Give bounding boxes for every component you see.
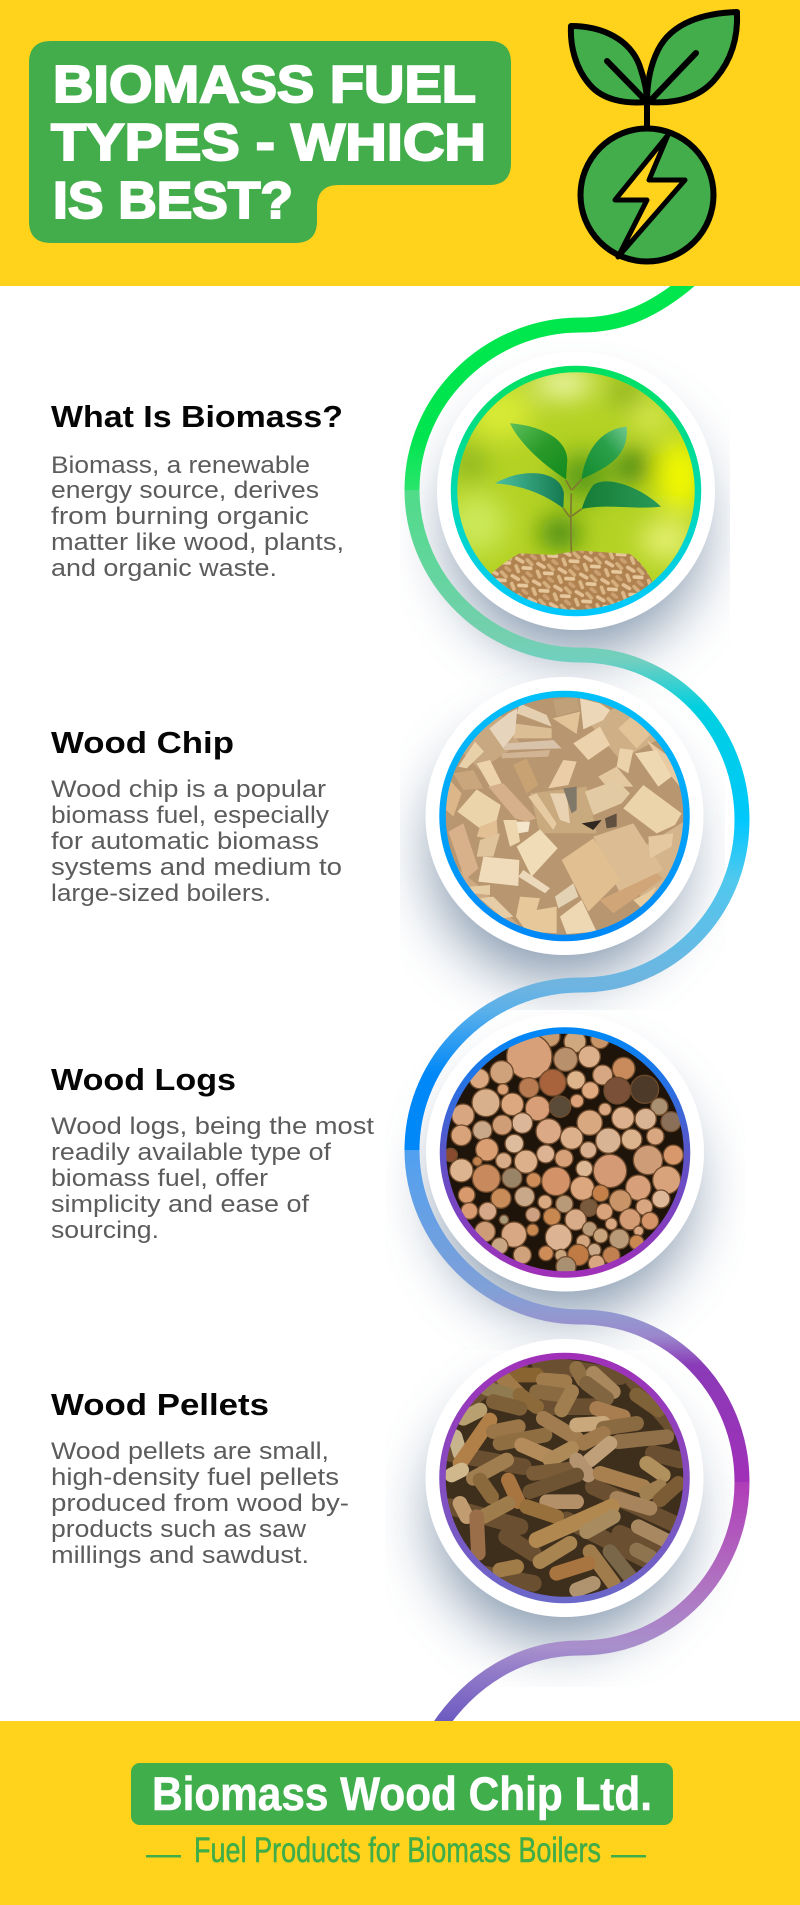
- step 2 text: Wood Chip: biomass fuel, especially: [51, 802, 329, 829]
- ring: [442, 1356, 686, 1600]
- title text: BIOMASS FUEL: [53, 56, 476, 114]
- photo circle 3: wood logs: [426, 1014, 704, 1292]
- title text: IS BEST?: [53, 172, 293, 230]
- ring: [443, 1030, 687, 1274]
- title text: [51, 56, 486, 230]
- step 1 text: What Is Biomass: [51, 399, 344, 582]
- step 2 text: Wood Chip: [51, 725, 342, 907]
- step 3 text: Wood Logs: Wood logs, being the most: [51, 1113, 374, 1140]
- ring: [442, 694, 686, 938]
- step 1 text: What Is Biomass: energy source, derives: [51, 477, 319, 504]
- header band: [0, 0, 800, 286]
- step 4 text: Wood Pellets: products such as saw: [51, 1516, 307, 1543]
- step 4 text: Wood Pellets: Wood Pellets: [51, 1387, 269, 1422]
- photo circle 4: wood pellets: [426, 1339, 704, 1617]
- step 2 text: Wood Chip: systems and medium to: [51, 854, 342, 881]
- ring: [454, 369, 698, 613]
- step 2 text: Wood Chip: large-sized boilers.: [51, 880, 271, 907]
- step 4 text: Wood Pellets: [51, 1387, 349, 1569]
- logo badge: [131, 1763, 673, 1825]
- icon: sprout with energy bolt: [571, 12, 737, 262]
- step 4 text: Wood Pellets: produced from wood by-: [51, 1490, 349, 1517]
- step 2 text: Wood Chip: Wood chip is a popular: [51, 776, 326, 803]
- step 1 text: What Is Biomass: matter like wood, plants,: [51, 529, 344, 556]
- step 4 text: Wood Pellets: Wood pellets are small,: [51, 1438, 329, 1465]
- step 3 text: Wood Logs: simplicity and ease of: [51, 1191, 309, 1218]
- tagline: Fuel Products for Biomass Boilers: [194, 1831, 601, 1870]
- step 1 text: What Is Biomass: and organic waste.: [51, 555, 277, 582]
- step 3 text: Wood Logs: biomass fuel, offer: [51, 1165, 268, 1192]
- step 4 text: Wood Pellets: millings and sawdust.: [51, 1542, 309, 1569]
- footer band: [0, 1721, 800, 1905]
- winding gradient path: [412, 274, 742, 1730]
- step 2 text: Wood Chip: Wood Chip: [51, 725, 234, 760]
- step 4 text: Wood Pellets: high-density fuel pellets: [51, 1464, 339, 1491]
- leaves: [510, 423, 567, 479]
- photo circle 2: wood chips: [426, 677, 704, 955]
- step 1 text: What Is Biomass: Biomass, a renewable: [51, 452, 310, 479]
- photo circle 1: seedling on pellets: [437, 352, 715, 630]
- step 3 text: Wood Logs: sourcing.: [51, 1217, 159, 1244]
- pellet pile: [492, 550, 652, 610]
- step 3 text: Wood Logs: readily available type of: [51, 1139, 331, 1166]
- step 3 text: Wood Logs: [51, 1062, 374, 1244]
- title text: TYPES - WHICH: [51, 114, 486, 172]
- stem: [563, 479, 582, 552]
- step 1 text: What Is Biomass: What Is Biomass?: [51, 399, 343, 434]
- card shadows: [432, 402, 702, 1641]
- title badge: [29, 41, 511, 243]
- step 2 text: Wood Chip: for automatic biomass: [51, 828, 319, 855]
- logo text: Biomass Wood Chip Ltd.: [152, 1767, 652, 1820]
- step 3 text: Wood Logs: Wood Logs: [51, 1062, 236, 1097]
- step 1 text: What Is Biomass: from burning organic: [51, 503, 309, 530]
